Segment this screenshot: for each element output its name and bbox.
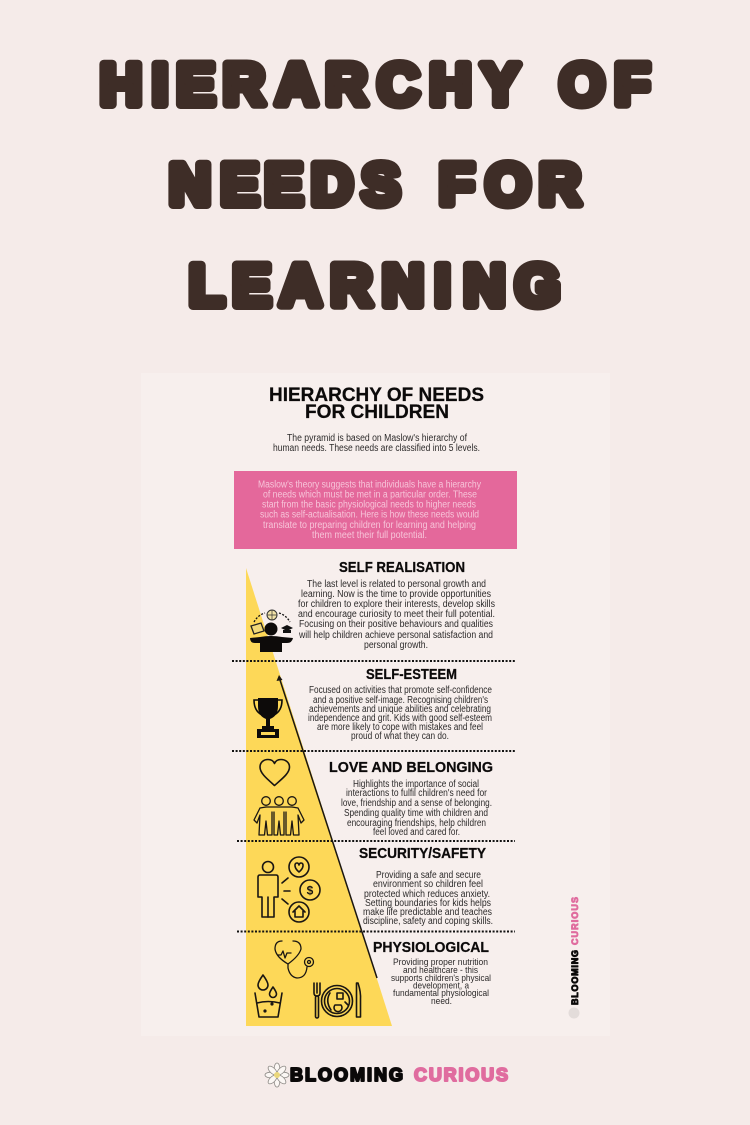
icon: three friends (254, 797, 304, 835)
pyramid (246, 568, 392, 1026)
level: self realisation: and encourage curiosity to meet their full potential. (298, 609, 495, 620)
icon: stethoscope (275, 941, 314, 978)
level: love and belonging: LOVE AND BELONGING (329, 760, 493, 776)
level: security/safety (359, 846, 493, 927)
level: love and belonging: interactions to fulfil children's need for (346, 788, 488, 799)
level dividers (232, 661, 515, 932)
bottom logo: BLOOMING (290, 1065, 403, 1085)
panel: Maslow's theory callout: of needs which must be met in a particular order. These (263, 490, 477, 501)
title: NEEDS FOR (169, 152, 581, 218)
panel: Maslow's theory callout: them meet their full potential. (312, 530, 427, 541)
card heading (269, 384, 484, 423)
level: self-esteem: and a positive self-image. Recognising children's (313, 695, 488, 706)
intro text: human needs. These needs are classified into 5 levels. (273, 443, 480, 454)
level: security/safety: Providing a safe and secure (376, 870, 481, 881)
level: security/safety: discipline, safety and coping skills. (363, 916, 493, 927)
level: self realisation (298, 560, 495, 651)
level: self realisation: for children to explore their interests, develop skills (298, 599, 495, 610)
icon: plate with fork and knife (314, 983, 361, 1018)
panel: Maslow's theory callout: start from the basic physiological needs to higher needs (262, 500, 476, 511)
side logo: CURIOUS (570, 897, 580, 945)
level: security/safety: make life predictable and teaches (363, 907, 492, 918)
icon: person with safety needs (258, 857, 320, 922)
level: physiological: development, a (413, 980, 470, 990)
level: self-esteem: proud of what they can do. (351, 731, 449, 742)
level: security/safety: SECURITY/SAFETY (359, 846, 486, 862)
intro text: The pyramid is based on Maslow's hierarchy of (287, 433, 467, 444)
arrow along pyramid edge (276, 675, 377, 978)
level: physiological: supports children's physical (391, 973, 491, 983)
level: security/safety: environment so children feel (373, 879, 483, 890)
level: love and belonging (329, 760, 493, 838)
dollar sign: $ (307, 884, 314, 898)
icon: water glass (255, 975, 282, 1017)
level: self-esteem: Focused on activities that promote self-confidence (309, 685, 492, 696)
panel: infographic card (141, 373, 610, 1036)
title: LEARNING (189, 254, 560, 318)
level: love and belonging: Highlights the importance of social (353, 779, 479, 790)
level: physiological (373, 940, 491, 1006)
level: self realisation: personal growth. (364, 640, 428, 651)
bottom logo (265, 1063, 508, 1087)
icon: heart (260, 760, 290, 786)
level: self-esteem: SELF-ESTEEM (366, 667, 457, 683)
title (100, 52, 650, 318)
panel: Maslow's theory callout (234, 471, 517, 549)
level: self realisation: will help children achieve personal satisfaction and (298, 630, 493, 641)
level: love and belonging: encouraging friendships, help children (347, 818, 486, 829)
level: love and belonging: Spending quality time with children and (344, 808, 488, 819)
bottom logo: CURIOUS (414, 1065, 508, 1085)
level: security/safety: protected which reduces anxiety. (364, 889, 490, 900)
level: self realisation: The last level is related to personal growth and (307, 579, 486, 590)
level: security/safety: Setting boundaries for kids helps (365, 898, 491, 909)
level: self-esteem: independence and grit. Kids with good self-esteem (308, 713, 492, 724)
level: love and belonging: love, friendship and a sense of belonging. (341, 798, 492, 809)
level: self-esteem: achievements and unique abilities and celebrating (309, 704, 491, 715)
level: physiological: PHYSIOLOGICAL (373, 940, 489, 956)
panel: Maslow's theory callout: translate to preparing children for learning and helping (263, 520, 476, 531)
icon: trophy (254, 698, 282, 738)
level: self-esteem: are more likely to cope with mistakes and feel (317, 722, 483, 733)
level: physiological: and healthcare - this (403, 965, 478, 975)
level: self realisation: Focusing on their positive behaviours and qualities (299, 619, 493, 630)
level: physiological: need. (431, 996, 452, 1006)
card heading: FOR CHILDREN (305, 401, 449, 423)
side logo: BLOOMING (570, 950, 580, 1005)
icon: daisy (265, 1063, 289, 1087)
card heading: HIERARCHY OF NEEDS (269, 384, 484, 406)
side logo (568, 897, 580, 1018)
panel: Maslow's theory callout: such as self-actualisation. Here is how these needs would (260, 510, 479, 521)
level: self realisation: SELF REALISATION (339, 560, 465, 576)
level: love and belonging: feel loved and cared for. (373, 827, 460, 838)
panel: Maslow's theory callout: Maslow's theory suggests that individuals have a hierarchy (258, 480, 481, 491)
level: physiological: fundamental physiological (393, 988, 489, 998)
level: self realisation: learning. Now is the time to provide opportunities (301, 589, 491, 600)
icon: person with globe, book and cap (250, 610, 293, 652)
level: physiological: Providing proper nutrition (393, 957, 488, 967)
level: self-esteem (308, 667, 492, 742)
intro text (273, 433, 480, 454)
title: HIERARCHY OF (100, 52, 650, 118)
